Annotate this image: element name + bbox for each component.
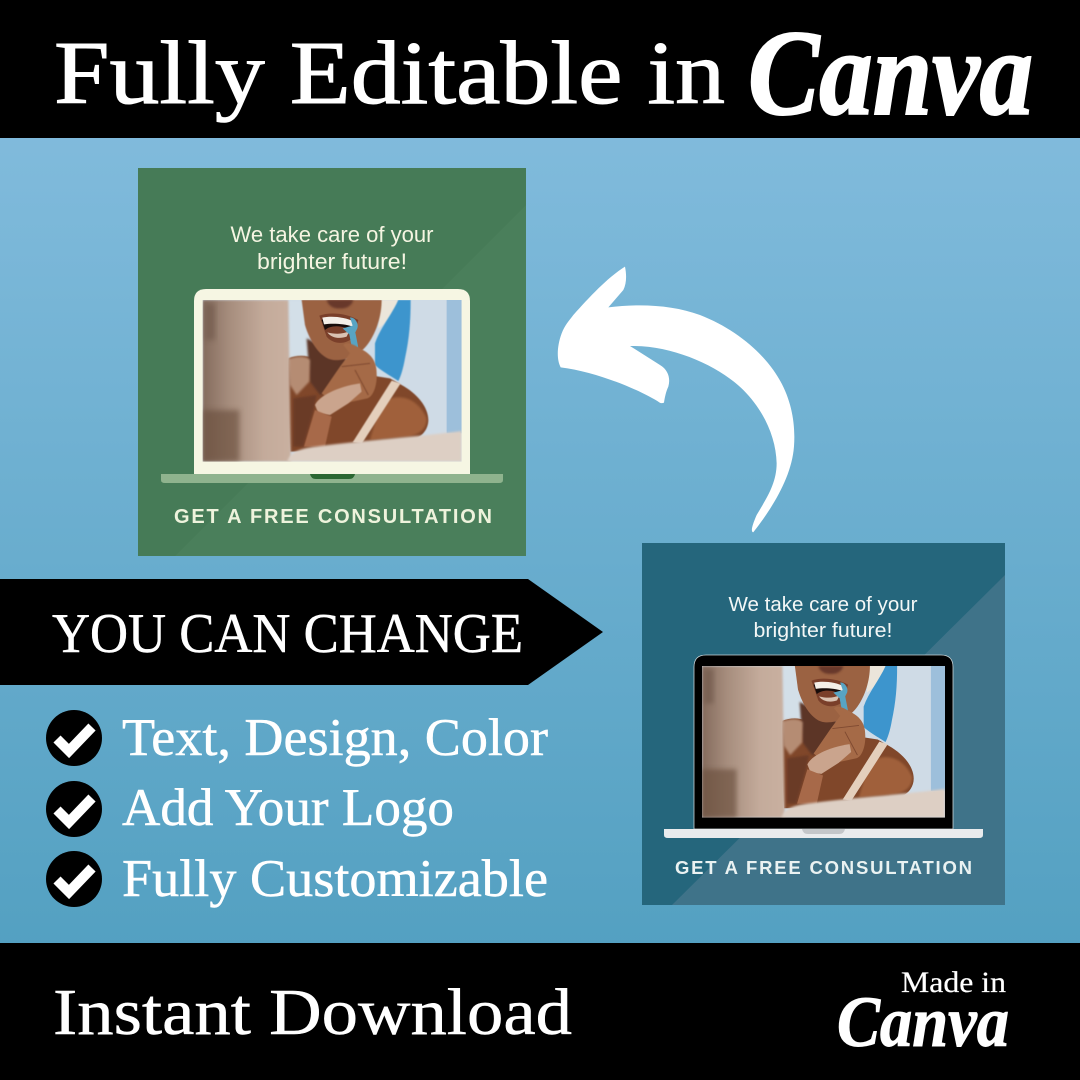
card headline: We take care of your bbox=[230, 222, 434, 247]
bottom banner bbox=[0, 943, 1080, 1080]
top banner bbox=[0, 0, 1080, 141]
laptop mockup: cream bbox=[161, 289, 503, 483]
panel: teal template card bbox=[642, 543, 1005, 905]
photo: woman flossing bbox=[702, 666, 945, 818]
Canva wordmark: Canva bbox=[748, 6, 1033, 141]
made in canva badge: Made in bbox=[901, 966, 1006, 999]
ribbon: you can change bbox=[0, 579, 603, 685]
card call to action: GET A FREE CONSULTATION bbox=[675, 857, 972, 878]
card headline: We take care of your bbox=[728, 594, 918, 616]
checklist bbox=[46, 709, 548, 908]
card call to action: GET A FREE CONSULTATION bbox=[174, 506, 492, 528]
curved arrow bbox=[558, 267, 794, 532]
panel: green template card bbox=[138, 168, 526, 556]
card headline bbox=[728, 594, 918, 642]
card headline: brighter future! bbox=[754, 620, 892, 642]
instant download: Instant Download bbox=[53, 976, 572, 1049]
made in canva badge: Canva bbox=[837, 982, 1009, 1062]
photo: woman flossing bbox=[203, 300, 462, 462]
card headline: brighter future! bbox=[257, 249, 407, 274]
laptop mockup: black bbox=[664, 655, 983, 838]
item: text, design, color: Text, Design, Color bbox=[122, 709, 548, 767]
ribbon label: YOU CAN CHANGE bbox=[52, 603, 523, 665]
item: fully customizable: Fully Customizable bbox=[122, 850, 548, 908]
card headline bbox=[230, 222, 434, 274]
item: add your logo: Add Your Logo bbox=[122, 779, 454, 837]
banner heading: Fully Editable in bbox=[54, 24, 725, 123]
